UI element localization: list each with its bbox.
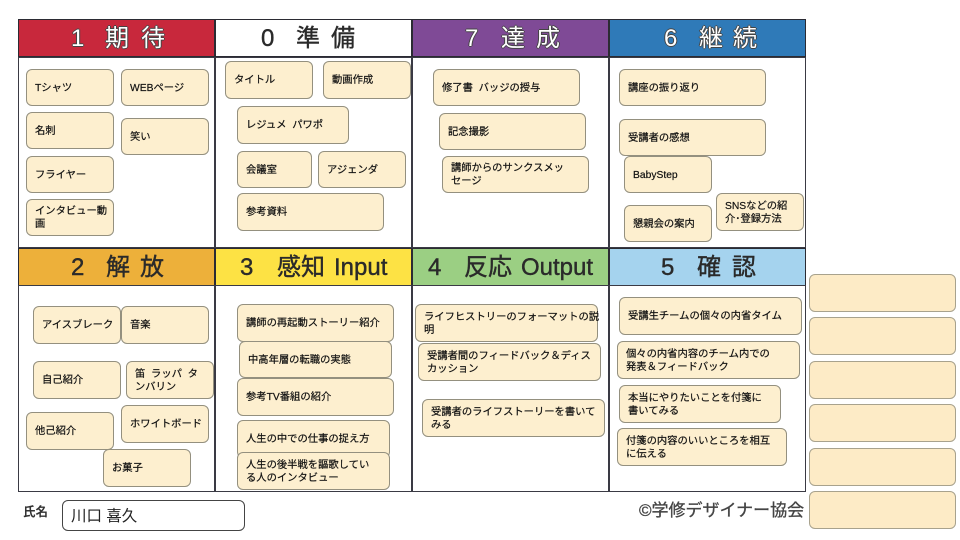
note: 参考TV番組の紹介: 参考TV番組の紹介 — [246, 392, 331, 403]
note: 他己紹介 — [26, 412, 114, 450]
header: 4 反応 Output: 反応 — [464, 254, 512, 281]
note: アジェンダ — [318, 151, 406, 188]
note: レジュメ パワポ: レジュメ パワポ — [246, 120, 323, 131]
header: 6 継続: 6 — [664, 25, 677, 52]
header: 2 解放: 解 — [106, 254, 130, 281]
panel: 5 確認 — [609, 285, 806, 492]
note: 付箋の内容のいいところを相互に伝える: 付箋の内容のいいところを相互 — [626, 436, 770, 446]
note: 音楽: 音楽 — [130, 320, 151, 331]
note: お菓子: お菓子 — [112, 463, 143, 474]
note: 講師からのサンクスメッセージ: 講師からのサンクスメッ — [451, 163, 564, 174]
header: 5 確認: 5 — [661, 254, 674, 281]
label: 氏名: 氏名 — [23, 505, 48, 519]
header: 1 期待: 期 — [105, 25, 129, 52]
note: 付箋の内容のいいところを相互に伝える: に伝える — [626, 448, 667, 460]
header: 4 反応 Output: Output — [521, 254, 593, 281]
header: 6 継続: 続 — [733, 25, 757, 52]
note: 受講者間のフィードバック＆ディスカッション: カッション — [427, 364, 478, 374]
note: レジュメ パワポ — [237, 106, 349, 144]
header: 0 準備: 0 — [261, 25, 274, 52]
note: 人生の後半戦を謳歌している人のインタビュー: る人のインタビュー — [246, 472, 339, 484]
note: 受講者の感想: 受講者の感想 — [628, 132, 690, 144]
header: 2 解放: 2 — [71, 254, 84, 281]
note: 受講者のライフストーリーを書いてみる — [422, 399, 605, 437]
note: SNSなどの紹介・登録方法: 介･登録方法 — [725, 214, 782, 224]
note: SNSなどの紹介・登録方法 — [716, 193, 804, 231]
panel: 4 反応 Output — [412, 285, 609, 492]
note: SNSなどの紹介・登録方法: SNSなどの紹 — [725, 200, 787, 212]
note: BabyStep — [624, 156, 712, 193]
header: 2 解放: 放 — [140, 254, 164, 281]
header: 5 確認: 認 — [732, 254, 756, 281]
note: WEBページ — [121, 69, 209, 106]
header: 0 準備 — [215, 19, 412, 57]
blank spare notes — [809, 274, 956, 529]
panel: 3 感知 Input — [215, 285, 412, 492]
header: 3 感知 Input: 感知 — [277, 254, 325, 281]
note: 講座の振り返り — [619, 69, 766, 106]
note: ホワイトボード — [121, 405, 209, 443]
note: BabyStep: BabyStep — [633, 170, 678, 180]
note: 受講生チームの個々の内省タイム: 受講生チームの個々の内省タイム — [628, 311, 782, 322]
panel: 7 達成 — [412, 57, 609, 248]
note: 講師からのサンクスメッセージ — [442, 156, 589, 193]
note: アイスブレーク: アイスブレーク — [42, 320, 113, 331]
note: ライフヒストリーのフォーマットの説明: 明 — [424, 324, 434, 336]
header: 3 感知 Input — [215, 248, 412, 286]
note: 懇親会の案内 — [624, 205, 712, 242]
header: 4 反応 Output — [412, 248, 609, 286]
note: 会議室: 会議室 — [246, 164, 277, 176]
note: 参考資料: 参考資料 — [246, 207, 287, 218]
note: インタビュー動画 — [26, 199, 114, 236]
note: 講師からのサンクスメッセージ: セージ — [451, 176, 482, 187]
header: 7 達成: 達 — [501, 25, 525, 52]
note: 懇親会の案内: 懇親会の案内 — [633, 218, 695, 230]
note: 動画作成 — [323, 61, 411, 99]
header: 1 期待: 1 — [71, 25, 84, 52]
note: 記念撮影 — [439, 113, 586, 150]
note: ホワイトボード: ホワイトボード — [130, 419, 202, 430]
note: 名刺 — [26, 112, 114, 149]
note: アイスブレーク — [33, 306, 121, 344]
note: Tシャツ — [26, 69, 114, 106]
note: 参考TV番組の紹介 — [237, 378, 394, 416]
header: 1 期待 — [18, 19, 215, 57]
note: 修了書 バッジの授与: 修了書 バッジの授与 — [442, 82, 540, 94]
note: 受講者の感想 — [619, 119, 766, 156]
note: 動画作成: 動画作成 — [332, 75, 373, 86]
note: 講師の再起動ストーリー紹介 — [237, 304, 394, 342]
note: お菓子 — [103, 449, 191, 487]
note: 人生の中での仕事の捉え方: 人生の中での仕事の捉え方 — [246, 434, 370, 445]
note: 会議室 — [237, 151, 312, 188]
panel: 6 継続 — [609, 57, 806, 248]
header: 7 達成 — [412, 19, 609, 57]
note: 個々の内省内容のチーム内での発表＆フィードバック — [617, 341, 800, 379]
header: 1 期待: 待 — [141, 25, 165, 52]
note: 人生の後半戦を謳歌している人のインタビュー — [237, 452, 390, 490]
note: 修了書 バッジの授与 — [433, 69, 580, 106]
header: 7 達成: 7 — [465, 25, 478, 52]
note: Tシャツ: Tシャツ — [35, 82, 72, 94]
note: 笛 ラッパ タンバリン — [126, 361, 214, 399]
note: インタビュー動画: 画 — [35, 219, 45, 230]
note: 記念撮影: 記念撮影 — [448, 126, 489, 138]
panel: 1 期待 — [18, 57, 215, 248]
name field: 川口 喜久 — [71, 508, 137, 525]
header: 2 解放 — [18, 248, 215, 286]
note: 名刺: 名刺 — [35, 126, 56, 136]
panel: 0 準備 — [215, 57, 412, 248]
header: 6 継続 — [609, 19, 806, 57]
note: 中高年層の転職の実態 — [239, 341, 392, 378]
panel: 2 解放 — [18, 285, 215, 492]
note: 受講生チームの個々の内省タイム — [619, 297, 802, 335]
note: 付箋の内容のいいところを相互に伝える — [617, 428, 787, 466]
note: 講座の振り返り: 講座の振り返り — [628, 82, 700, 94]
copyright: ©学修デザイナー協会 — [639, 501, 804, 520]
note: 参考資料 — [237, 193, 384, 231]
note: 講師の再起動ストーリー紹介: 講師の再起動ストーリー紹介 — [246, 318, 380, 329]
header: 3 感知 Input: 3 — [240, 254, 253, 281]
header: 5 確認 — [609, 248, 806, 286]
note: アジェンダ: アジェンダ — [327, 164, 378, 176]
note: タイトル: タイトル — [234, 75, 275, 86]
header: 3 感知 Input: Input — [334, 254, 387, 281]
note: フライヤー: フライヤー — [35, 170, 86, 180]
note: 受講者間のフィードバック＆ディスカッション — [418, 343, 601, 381]
note: 個々の内省内容のチーム内での発表＆フィードバック: 個々の内省内容のチーム内での — [626, 348, 770, 360]
name field — [62, 500, 245, 531]
note: 受講者のライフストーリーを書いてみる: 受講者のライフストーリーを書いて — [431, 406, 595, 418]
note: WEBページ: WEBページ — [130, 82, 184, 94]
header: 0 準備: 準 — [296, 25, 320, 52]
note: 音楽 — [121, 306, 209, 344]
note: 人生の後半戦を謳歌している人のインタビュー: 人生の後半戦を謳歌してい — [246, 460, 369, 470]
note: 個々の内省内容のチーム内での発表＆フィードバック: 発表＆フィードバック — [626, 362, 729, 372]
note: タイトル — [225, 61, 313, 99]
note: 本当にやりたいことを付箋に書いてみる — [619, 385, 781, 423]
header: 0 準備: 備 — [331, 25, 355, 52]
note: 笛 ラッパ タンバリン: ンバリン — [135, 382, 176, 392]
note: ライフヒストリーのフォーマットの説明: ライフヒストリーのフォーマットの説 — [424, 312, 599, 322]
header: 7 達成: 成 — [536, 25, 560, 52]
note: 笑い — [121, 118, 209, 155]
note: 他己紹介: 他己紹介 — [35, 426, 76, 437]
header: 5 確認: 確 — [697, 254, 721, 281]
header: 4 反応 Output: 4 — [428, 254, 441, 281]
note: 中高年層の転職の実態: 中高年層の転職の実態 — [248, 354, 351, 366]
note: 笛 ラッパ タンバリン: 笛 ラッパ タ — [135, 368, 198, 380]
note: 自己紹介 — [33, 361, 121, 399]
note: 受講者間のフィードバック＆ディスカッション: 受講者間のフィードバック＆ディス — [427, 350, 591, 362]
note: 本当にやりたいことを付箋に書いてみる: 書いてみる — [628, 406, 679, 416]
note: 人生の中での仕事の捉え方 — [237, 420, 390, 458]
note: ライフヒストリーのフォーマットの説明 — [415, 304, 598, 342]
note: 笑い: 笑い — [130, 132, 151, 142]
note: 受講者のライフストーリーを書いてみる: みる — [431, 420, 452, 430]
header: 6 継続: 継 — [699, 25, 723, 52]
note: インタビュー動画: インタビュー動 — [35, 206, 107, 217]
note: フライヤー — [26, 156, 114, 193]
note: 自己紹介: 自己紹介 — [42, 375, 83, 386]
note: 本当にやりたいことを付箋に書いてみる: 本当にやりたいことを付箋に — [628, 392, 762, 404]
